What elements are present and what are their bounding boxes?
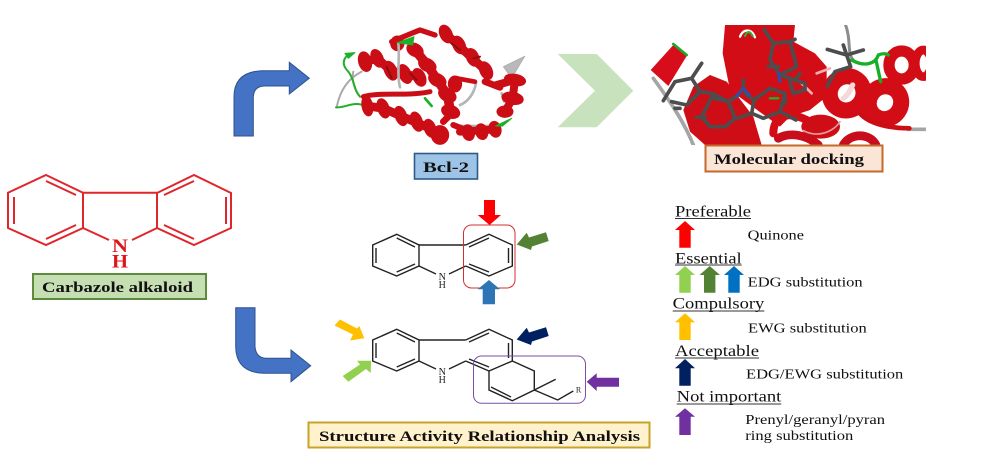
helix: top right [438, 25, 500, 87]
legend: Acceptable: EDG/EWG substitution [746, 367, 904, 382]
label: Molecular docking [706, 146, 882, 172]
legend: Not important: Prenyl/geranyl/pyran [745, 412, 885, 427]
molecule: carbazole core in red: N [112, 236, 128, 257]
legend: Essential: EDG substitution [748, 275, 863, 290]
legend: Preferable: Quinone [748, 227, 804, 242]
helix: lower middle [363, 77, 475, 97]
label: Bcl-2: Bcl-2 [423, 160, 469, 176]
legend: Not important [675, 389, 885, 443]
label: Bcl-2 [414, 154, 478, 179]
image: molecular docking scene [651, 23, 931, 145]
arrow: red, top of ring [478, 200, 501, 225]
molecule: SAR carbazole with highlighted ring: H [439, 280, 446, 291]
legend [673, 204, 904, 443]
label: Carbazole alkaloid [33, 274, 206, 299]
molecule: SAR pyrano-carbazole with side chain: N [439, 367, 446, 378]
helix: bottom right [453, 122, 501, 140]
helix: upper left [358, 49, 427, 87]
label: Molecular docking: Molecular docking [714, 152, 865, 168]
arrow: curved up to Bcl-2 [234, 62, 309, 136]
arrow: light green [343, 361, 371, 382]
legend: Not important: Not important [677, 389, 782, 406]
molecule: carbazole core in red [8, 175, 231, 272]
chevron arrow [558, 54, 633, 127]
molecule: SAR carbazole with highlighted ring [373, 225, 515, 291]
molecule: SAR carbazole with highlighted ring: N [439, 272, 446, 283]
label: Structure Activity Relationship Analysis: Structure Activity Relationship Analysis [319, 429, 640, 445]
legend: Preferable [675, 204, 804, 248]
molecule: SAR pyrano-carbazole with side chain: H [439, 375, 446, 386]
legend: Compulsory [673, 295, 867, 340]
legend: Acceptable [675, 343, 904, 386]
arrow: purple [587, 373, 619, 391]
arrow: blue, bottom of ring [478, 280, 500, 304]
protein: Bcl-2 ribbon structure [336, 25, 525, 143]
legend: Compulsory: Compulsory [673, 295, 765, 312]
label: Carbazole alkaloid: Carbazole alkaloid [42, 280, 193, 296]
helix: centre diagonal [392, 30, 460, 122]
helix: lower left [362, 97, 447, 143]
molecule: SAR pyrano-carbazole with side chain: R [576, 386, 582, 394]
arrow: navy [517, 327, 549, 345]
legend: Not important: ring substitution [745, 428, 854, 443]
legend: Acceptable: Acceptable [675, 343, 759, 360]
label: Structure Activity Relationship Analysis [308, 422, 650, 448]
molecule: SAR pyrano-carbazole with side chain [373, 329, 586, 403]
arrow: curved down to SAR analysis [236, 308, 311, 382]
helix: right side [497, 74, 525, 116]
arrow: yellow [334, 320, 364, 340]
legend: Essential: Essential [675, 250, 742, 267]
molecule: carbazole core in red: H [112, 252, 128, 272]
legend: Essential [675, 250, 863, 293]
arrow: dark green, right of ring [517, 232, 549, 250]
legend: Compulsory: EWG substitution [748, 321, 867, 336]
legend: Preferable: Preferable [675, 204, 751, 220]
